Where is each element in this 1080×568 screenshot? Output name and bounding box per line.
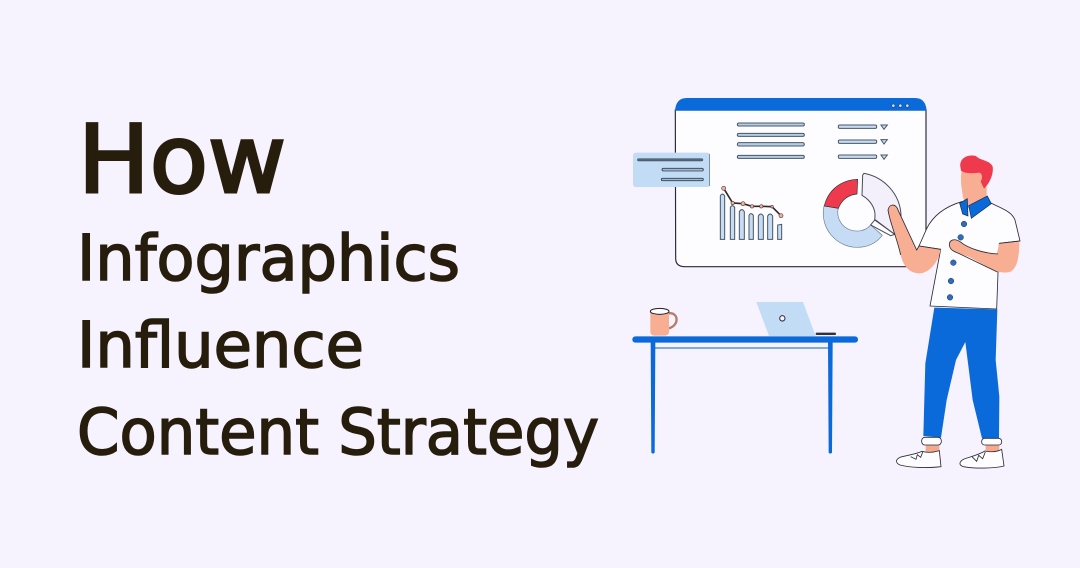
trousers [923, 308, 999, 438]
cuffs and ankles [922, 437, 1002, 452]
shirt buttons [947, 221, 967, 300]
left shoe [896, 451, 941, 468]
window panel [675, 110, 926, 267]
bent arm [949, 240, 1019, 273]
pulled-out segment [862, 173, 901, 234]
table crossbar [653, 347, 830, 349]
table leg right [828, 342, 833, 454]
title: Influence [77, 309, 364, 382]
table top [632, 336, 858, 343]
title: Infographics [77, 222, 460, 295]
mug [650, 308, 677, 336]
floating card [633, 153, 710, 187]
window title bar [675, 98, 927, 111]
small white segment [871, 220, 895, 236]
pointing arm outline [888, 205, 941, 255]
laptop base [816, 333, 836, 335]
illustration: desk [632, 302, 858, 454]
bar chart [720, 194, 782, 239]
illustration: presenter [888, 156, 1020, 468]
laptop camera dot [780, 316, 785, 321]
collar [960, 196, 991, 218]
dropdown rows [838, 125, 887, 159]
neck and face [961, 167, 987, 208]
title [77, 106, 599, 469]
pointing arm [888, 205, 941, 273]
table leg left [651, 342, 655, 454]
right shoe [960, 449, 1004, 468]
left shoe laces [911, 452, 923, 459]
donut light segment [823, 206, 882, 247]
donut red segment [824, 179, 858, 208]
laptop [756, 302, 816, 336]
hair [960, 156, 993, 189]
title: Content Strategy [77, 396, 599, 469]
title: How [78, 106, 286, 215]
line chart overlay [722, 186, 783, 218]
window control dots [892, 104, 909, 107]
donut chart [823, 173, 901, 247]
right shoe laces [972, 452, 985, 461]
illustration: presentation window [633, 98, 927, 267]
text lines [737, 123, 804, 158]
shirt [919, 202, 1020, 309]
bent arm outline [949, 240, 1020, 272]
